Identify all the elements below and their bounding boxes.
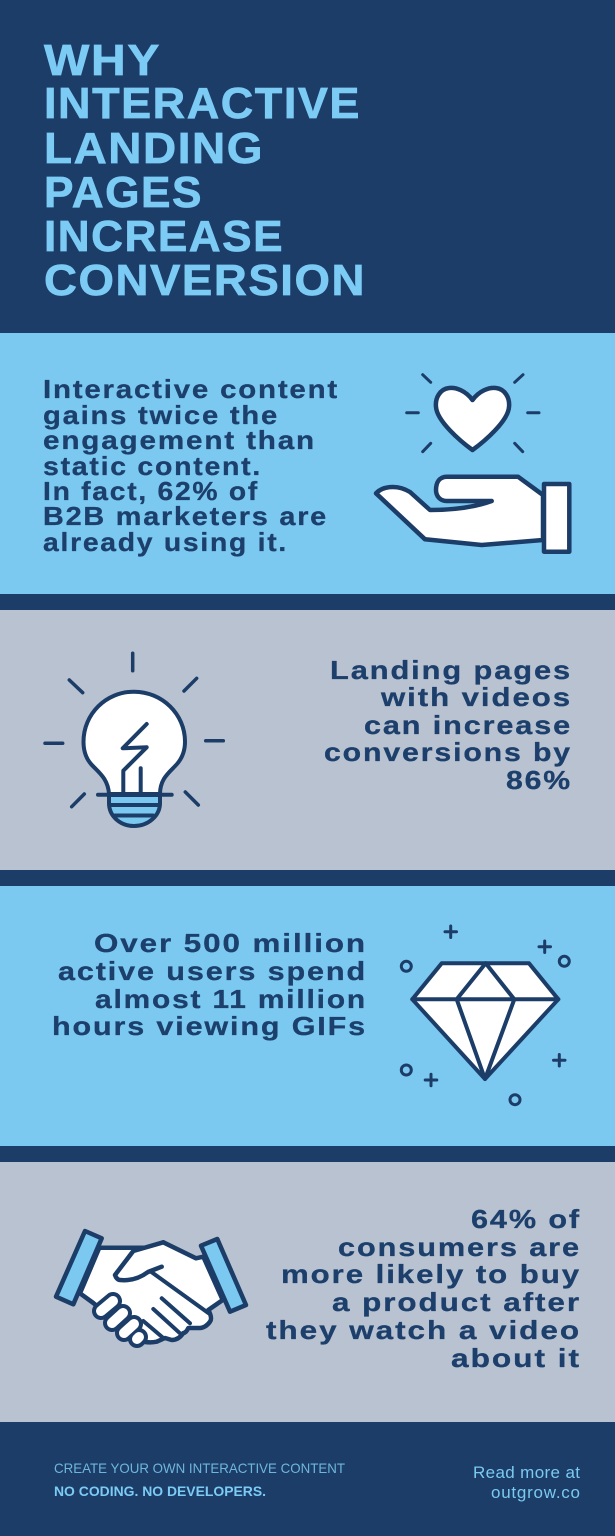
text: engagement statistic: already using it. (43, 527, 288, 557)
text: GIF statistic: active users spend (58, 956, 367, 986)
title: LANDING (44, 124, 264, 173)
text: video statistic: conversions by (324, 737, 572, 767)
text: call to action (54, 1460, 345, 1499)
text: engagement statistic: engagement than (43, 425, 316, 455)
text: call to action: CREATE YOUR OWN INTERACTIVE CONTENT (54, 1460, 345, 1476)
title: INCREASE (44, 212, 284, 261)
text: GIF statistic: almost 11 million (95, 984, 367, 1014)
text: GIF statistic (52, 928, 367, 1041)
text: engagement statistic (43, 374, 339, 557)
text: read more link (473, 1463, 580, 1502)
panel: header (0, 0, 615, 333)
text: video statistic: 86% (506, 765, 572, 795)
icon: light bulb (45, 653, 223, 826)
text: engagement statistic: In fact, 62% of (43, 476, 259, 506)
text: engagement statistic: gains twice the (43, 400, 279, 430)
panel: consumers (0, 1162, 615, 1422)
icon: handshake (56, 1231, 246, 1342)
text: consumer statistic: they watch a video (266, 1315, 581, 1345)
text: consumer statistic: more likely to buy (281, 1259, 581, 1289)
panel: videos (0, 610, 615, 870)
text: read more link: Read more at (473, 1463, 580, 1482)
text: video statistic: with videos (380, 682, 572, 712)
text: read more link: outgrow.co (491, 1483, 580, 1502)
text: consumer statistic: about it (451, 1343, 581, 1373)
icon: hand holding heart (376, 375, 569, 552)
panel: GIFs (0, 886, 615, 1146)
text: consumer statistic: a product after (332, 1287, 581, 1317)
text: video statistic: Landing pages (330, 655, 572, 685)
text: GIF statistic: Over 500 million (94, 928, 367, 958)
panel: footer (0, 1422, 615, 1536)
panel: engagement (0, 333, 615, 594)
text: engagement statistic: static content. (43, 451, 262, 481)
icon: diamond (401, 926, 569, 1105)
text: call to action: NO CODING. NO DEVELOPERS. (54, 1483, 266, 1499)
text: GIF statistic: hours viewing GIFs (52, 1011, 367, 1041)
text: consumer statistic (266, 1204, 581, 1373)
text: video statistic (324, 655, 572, 795)
text: engagement statistic: B2B marketers are (43, 501, 328, 531)
title (44, 36, 366, 305)
title: CONVERSION (44, 256, 366, 305)
title: INTERACTIVE (44, 79, 361, 128)
title: PAGES (44, 168, 203, 217)
text: consumer statistic: 64% of (471, 1204, 581, 1234)
text: consumer statistic: consumers are (338, 1232, 581, 1262)
title: WHY (44, 36, 161, 85)
text: engagement statistic: Interactive content (43, 374, 339, 404)
text: video statistic: can increase (364, 710, 572, 740)
